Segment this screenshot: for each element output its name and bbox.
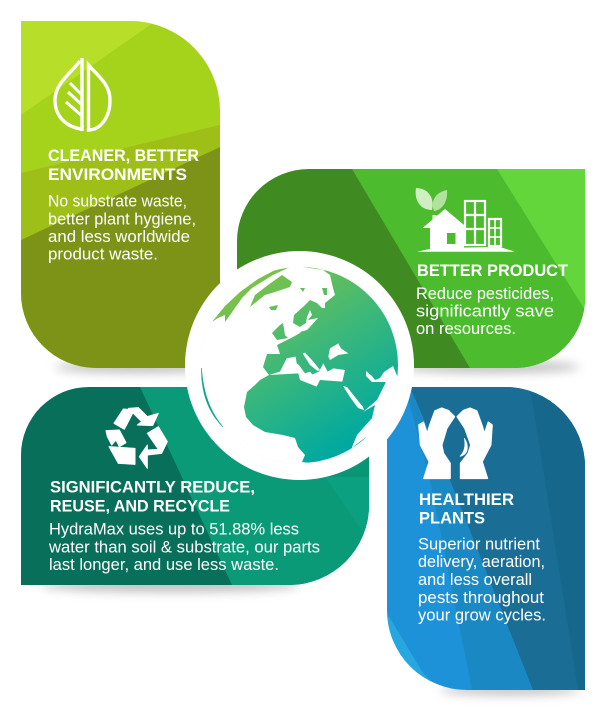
- body text: significantly save: [416, 302, 554, 320]
- heading: HEALTHIER: [419, 490, 514, 509]
- heading: [48, 146, 199, 184]
- panel background: teal bands: [21, 387, 369, 585]
- body text: HydraMax uses up to 51.88% less: [49, 520, 299, 538]
- panel background: blue bands: [385, 387, 585, 695]
- body text: last longer, and use less waste.: [49, 555, 279, 574]
- body text: No substrate waste,: [48, 192, 187, 210]
- body text: your grow cycles.: [418, 606, 546, 624]
- globe crescent edge: [201, 368, 223, 427]
- body text: product waste.: [48, 244, 158, 264]
- heading: ENVIRONMENTS: [48, 165, 187, 184]
- heading: [50, 478, 255, 516]
- disc edge cover: [200, 265, 400, 465]
- globe: [180, 251, 414, 480]
- panel shadows: [40, 361, 580, 695]
- icon: house and buildings with leaves: [416, 188, 515, 252]
- heading: [419, 490, 514, 528]
- panel: significantly reduce, reuse, and recycle: [21, 387, 369, 585]
- panel background: green bands: [237, 169, 585, 368]
- panel: better product: [237, 169, 585, 368]
- heading: SIGNIFICANTLY REDUCE,: [50, 478, 255, 497]
- body text: better plant hygiene,: [48, 210, 196, 228]
- body text: Reduce pesticides,: [416, 284, 554, 303]
- body text: pests throughout: [418, 588, 544, 607]
- globe map: [201, 266, 399, 464]
- icon: leaf: [55, 58, 110, 131]
- heading: REUSE, AND RECYCLE: [50, 497, 230, 516]
- heading: CLEANER, BETTER: [48, 146, 199, 165]
- body text: and less overall: [418, 570, 532, 589]
- heading: PLANTS: [419, 508, 485, 528]
- body text: [416, 284, 554, 338]
- body text: [418, 534, 546, 624]
- body text: and less worldwide: [48, 227, 190, 246]
- body text: [48, 192, 196, 264]
- body text: Superior nutrient: [418, 534, 540, 554]
- body text: on resources.: [416, 319, 516, 338]
- body text: delivery, aeration,: [418, 552, 545, 571]
- icon: recycle symbol: [106, 408, 167, 468]
- body text: water than soil & substrate, our parts: [48, 538, 320, 556]
- body text: [48, 520, 320, 574]
- globe white ring: [185, 251, 414, 480]
- panel: healthier plants: [385, 387, 585, 695]
- heading: BETTER PRODUCT: [417, 261, 569, 280]
- panel background: lime bands: [21, 21, 220, 368]
- icon: hands holding water drop: [419, 408, 492, 478]
- panel: cleaner, better environments: [21, 21, 220, 368]
- Greenland and islands: [212, 267, 366, 448]
